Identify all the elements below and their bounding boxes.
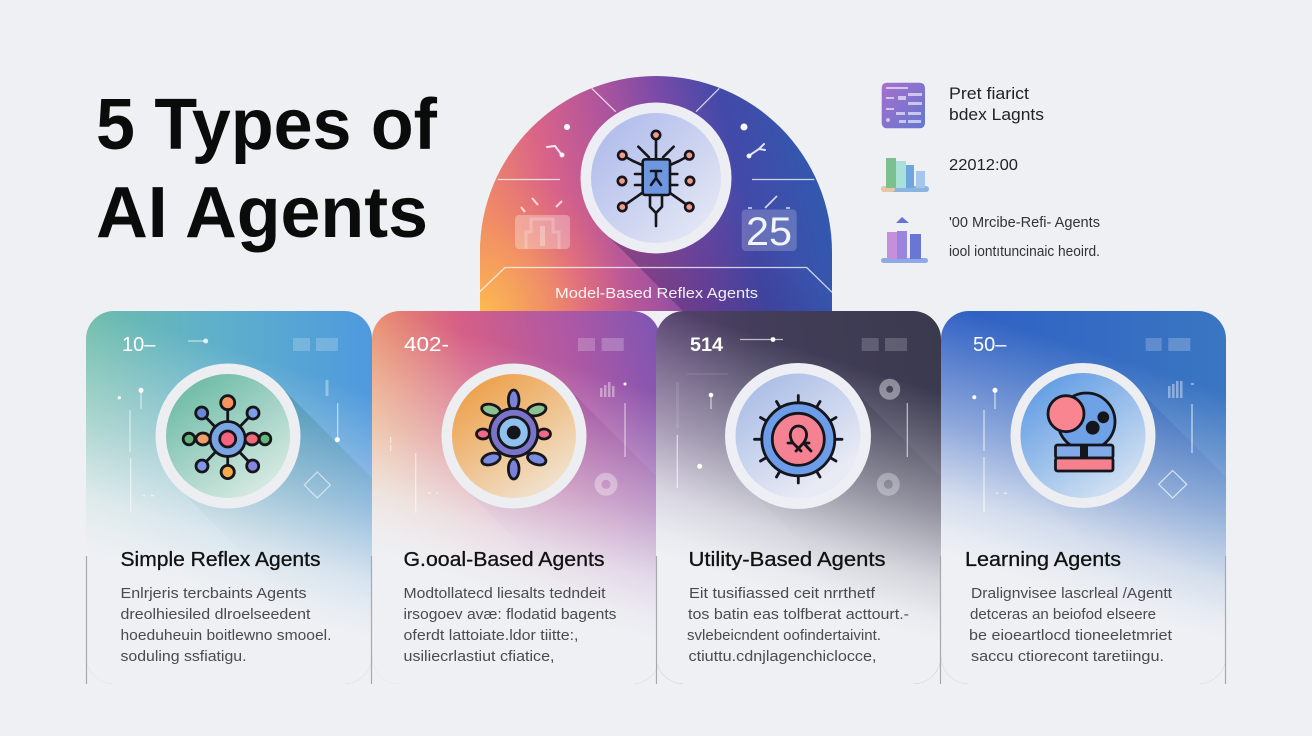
card heading: Learning Agents	[965, 548, 1121, 571]
card description: Dralignvisee lascrleal /Agentt	[971, 585, 1173, 602]
legend text 3: iool iontıtuncinaic heoird.	[949, 244, 1100, 260]
card description: ctiuttu.cdnjlagenchiclocce,	[688, 648, 876, 665]
icon: calendar tile 25: 25	[746, 210, 792, 254]
card description: dreolhiesiled dlroelseedent	[120, 606, 311, 623]
card description	[687, 585, 909, 665]
card description	[404, 585, 616, 665]
legend text 2: 22012:00	[949, 157, 1018, 174]
card description: Modtollatecd liesalts tedndeit	[404, 585, 606, 602]
icon: target with loop	[725, 363, 871, 509]
card heading: Simple Reflex Agents	[120, 548, 320, 571]
legend text 1	[949, 85, 1044, 124]
icon: bars green-blue	[881, 158, 929, 192]
number: 402-	[404, 334, 449, 356]
card description: tos batin eas tolfberat acttourt.-	[688, 606, 909, 623]
icon: data sheet	[882, 83, 925, 128]
panel: simple reflex agents	[86, 311, 372, 684]
legend text 1: Pret fiarict	[949, 85, 1029, 103]
icon: learning head on base	[1010, 363, 1156, 508]
icon: left building tile	[515, 198, 570, 249]
card description: be eioeartlocd tioneeletmriet	[969, 627, 1173, 644]
legend text 3: '00 Mrcibe-Refi- Agents	[949, 215, 1100, 231]
card description: Enlrjeris tercbaints Agents	[120, 585, 306, 602]
icon: hub network	[156, 364, 300, 508]
decorations	[676, 337, 907, 492]
card description: Eit tusifiassed ceit nrrthetf	[689, 585, 876, 602]
number: 50–	[973, 334, 1007, 356]
title	[96, 85, 438, 253]
card description: detceras an beiofod elseere	[970, 606, 1156, 623]
icon: spark marks	[547, 124, 765, 158]
card description: oferdt lattoiate.ldor tiitte:,	[404, 627, 578, 644]
label: model-based reflex agents: Model-Based Reflex Agents	[555, 285, 758, 302]
title: AI Agents	[96, 173, 428, 253]
icon: bars purple	[881, 217, 928, 263]
card description	[120, 585, 332, 665]
panel: utility-based agents	[656, 311, 941, 684]
number: 10–	[122, 334, 156, 356]
card heading: G.ooal-Based Agents	[404, 548, 604, 571]
decorations	[972, 338, 1194, 512]
icon: eye flower	[442, 364, 586, 508]
title: 5 Types of	[96, 85, 438, 165]
card description: svlebeicndent oofindertaivint.	[687, 627, 881, 644]
icon: chip with pen nib	[580, 102, 732, 254]
legend text 1: bdex Lagnts	[949, 106, 1044, 124]
card description: hoeduheuin boitlewno smooel.	[120, 627, 332, 644]
card description: saccu ctiorecont taretiingu.	[971, 648, 1164, 665]
panel: learning agents	[941, 311, 1226, 684]
panel: model-based reflex agents arch	[480, 76, 832, 311]
card heading: Utility-Based Agents	[688, 548, 886, 571]
panel: goal-based agents	[372, 311, 658, 684]
card description: usiliecrlastiut cfiatice,	[404, 648, 554, 665]
card description: irsogoev avæ: flodatid bagents	[404, 606, 616, 623]
legend text 3	[949, 215, 1100, 260]
number: 514	[690, 335, 723, 356]
decorations	[118, 338, 340, 512]
decorations	[391, 338, 626, 513]
card description	[969, 585, 1173, 665]
icon: calendar tile 25	[742, 196, 797, 254]
panel: legend column	[881, 83, 1100, 263]
card description: soduling ssfiatigu.	[120, 648, 246, 665]
